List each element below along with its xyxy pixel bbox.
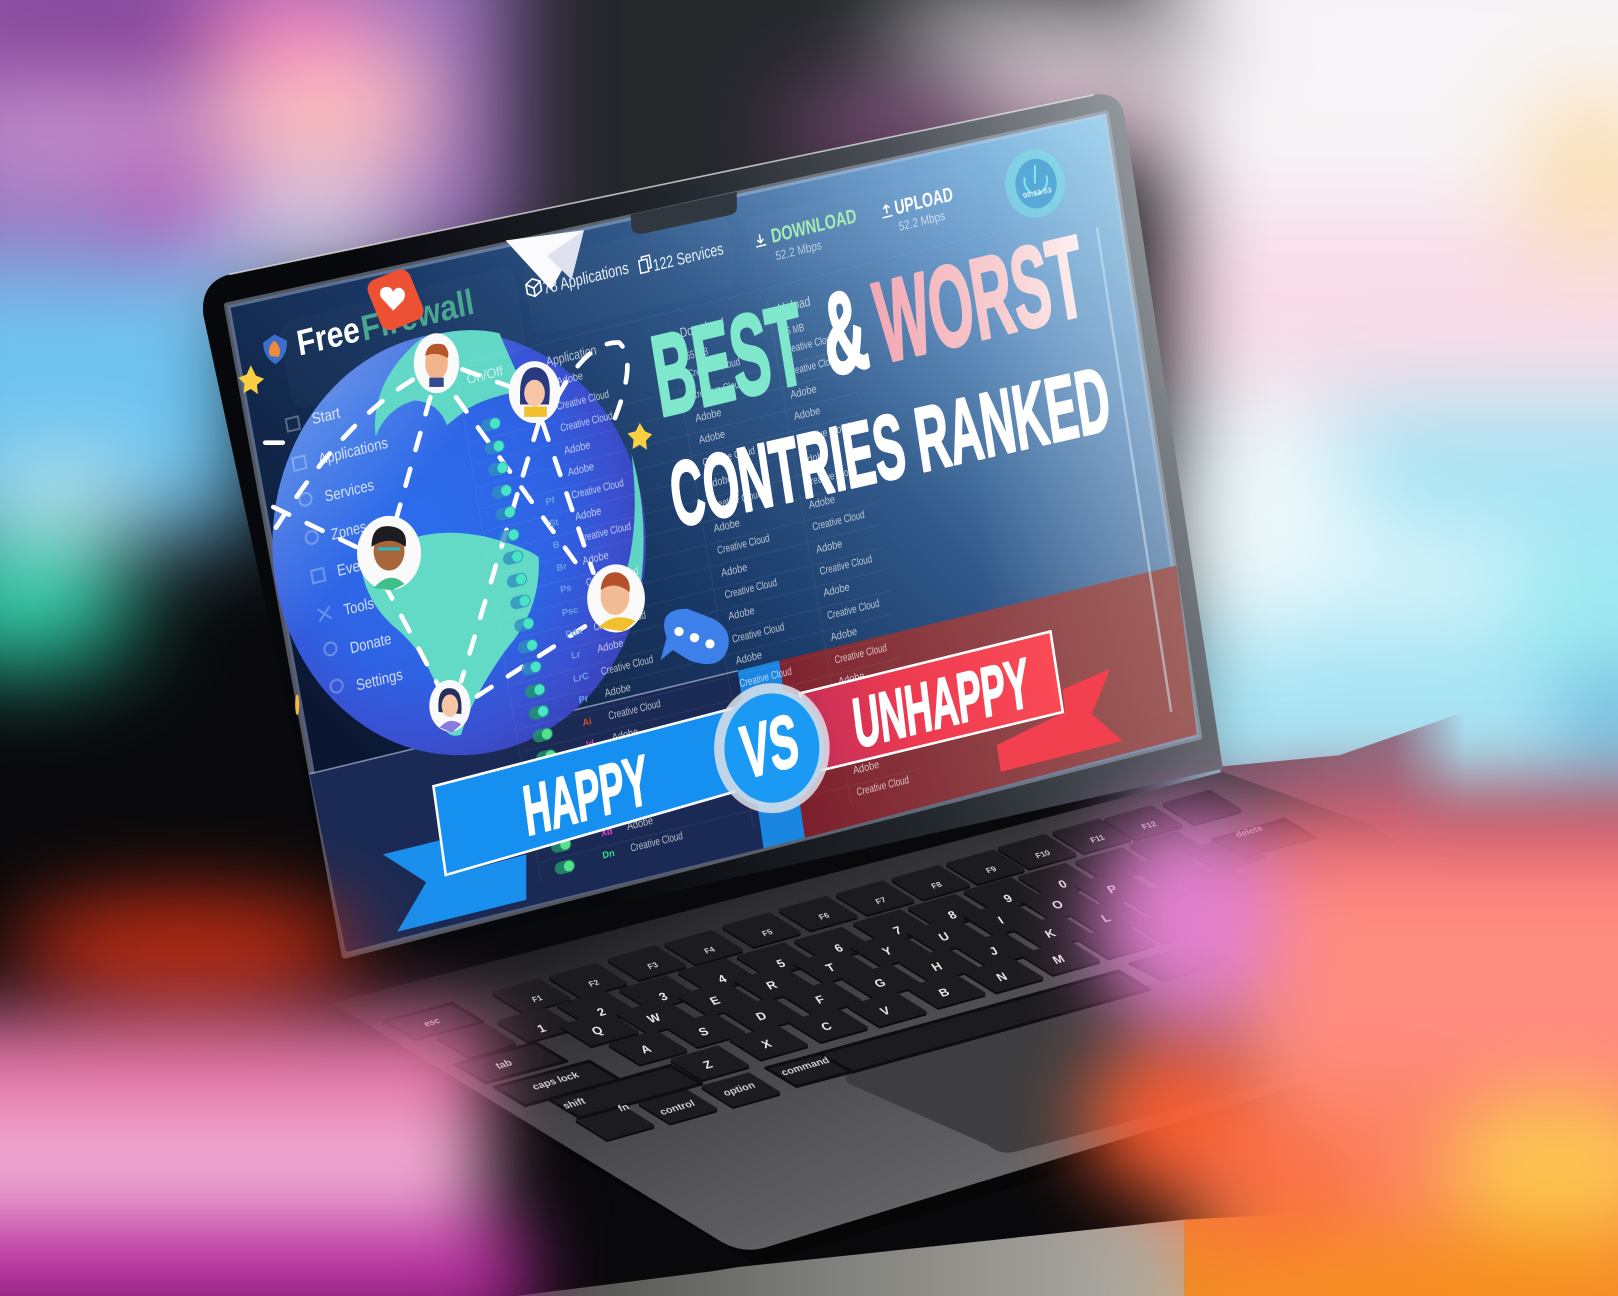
avatar: bottom	[429, 680, 471, 733]
unhappy label: UNHAPPY	[849, 643, 1034, 763]
sidebar menu	[311, 394, 427, 695]
table rows column 1: Creative Cloud	[630, 830, 684, 855]
sidebar menu: Events	[336, 553, 379, 580]
background: blurred colour field	[0, 0, 1618, 825]
table headers: Adobe	[556, 370, 584, 388]
key labels: 2	[594, 1005, 609, 1019]
key labels: L	[1098, 911, 1114, 925]
table rows column 2: Adobe	[742, 693, 770, 712]
key labels: 5	[774, 957, 788, 970]
table rows column 2	[687, 356, 807, 778]
sidebar menu: Services	[323, 477, 376, 506]
table rows column 3: Creative Cloud	[782, 332, 836, 357]
key labels: N	[994, 970, 1010, 984]
modifier key labels: F12	[1140, 820, 1159, 831]
table headers: Upload	[777, 294, 811, 316]
table rows column 3: Adobe	[837, 670, 865, 688]
table rows column 3: Creative Cloud	[804, 464, 858, 489]
sidebar icons	[286, 416, 344, 694]
app icon labels: Ps	[559, 582, 572, 595]
ribbon band	[800, 631, 1063, 772]
table rows column 1: Adobe	[589, 594, 617, 612]
key labels: 9	[1001, 892, 1015, 905]
key labels: Y	[879, 944, 895, 958]
avatar: upper right	[509, 361, 560, 423]
bezel	[203, 94, 1223, 965]
red zone	[779, 565, 1197, 838]
avatar: top	[414, 333, 459, 393]
table rows column 2: Adobe	[750, 738, 778, 756]
table headers: Download	[679, 315, 725, 341]
app icon labels: Id	[585, 738, 595, 750]
modifier key labels: F9	[984, 865, 999, 875]
modifier key labels: F8	[929, 880, 944, 890]
key labels: 0	[1055, 877, 1070, 891]
notch	[630, 192, 737, 234]
laptop lid	[203, 94, 1223, 965]
top bar stats: 122 Services	[652, 239, 725, 275]
table rows column 2: Adobe	[705, 473, 733, 491]
laptop underside	[332, 784, 1610, 1265]
app icon labels: Lr	[570, 649, 581, 661]
icon: cube	[525, 277, 542, 298]
key labels: 6	[832, 941, 846, 955]
key labels: O	[1049, 898, 1066, 912]
upload speed	[893, 183, 957, 234]
table rows column 2: Adobe	[698, 428, 726, 447]
key labels: P	[1104, 882, 1120, 896]
app icon labels: Psc	[561, 604, 579, 618]
table rows column 1: Creative Cloud	[608, 698, 662, 723]
key labels: F	[813, 993, 828, 1006]
power button	[1005, 150, 1065, 218]
ribbon: unhappy	[800, 631, 1123, 772]
table rows column 3: Creative Cloud	[834, 642, 888, 667]
key labels: X	[759, 1037, 775, 1051]
table rows column 3: Adobe	[800, 449, 828, 468]
app icon labels: Ai	[582, 716, 592, 728]
table headers: 55 MB	[685, 345, 709, 363]
download speed: 52.2 Mbps	[774, 238, 823, 263]
modifier key labels: F3	[646, 961, 660, 971]
table rows column 1: Adobe	[567, 461, 595, 479]
title: best and worst: BEST	[644, 279, 813, 442]
heart badge	[364, 266, 427, 333]
table rows column 1: Adobe	[626, 815, 654, 833]
table rows column 2: Creative Cloud	[687, 356, 741, 381]
table rows column 1: Adobe	[611, 726, 639, 744]
icon: upload arrow	[881, 204, 893, 218]
title: countries ranked: CONTRIES RANKED	[664, 348, 1117, 547]
table rows column 3: Creative Cloud	[826, 597, 880, 622]
globe	[272, 330, 646, 755]
key labels: A	[638, 1042, 654, 1056]
table rows column 1: Creative Cloud	[559, 410, 613, 435]
title: best and worst	[644, 212, 1093, 442]
app icon labels	[543, 494, 621, 861]
download speed	[769, 205, 861, 264]
key labels: T	[823, 961, 839, 974]
stone table	[516, 1220, 1185, 1296]
table headers	[466, 287, 815, 416]
key labels: J	[986, 945, 1001, 958]
modifier key labels: delete	[1233, 823, 1265, 839]
avatars	[357, 333, 645, 733]
sidebar menu: Zones	[330, 518, 368, 544]
table rows column 2: Creative Cloud	[724, 577, 778, 601]
vs label: VS	[736, 698, 803, 795]
avatar: right	[587, 564, 645, 633]
app icon labels: Dn	[602, 848, 616, 861]
chat bubble	[660, 609, 729, 664]
table rows column 2: Creative Cloud	[691, 378, 745, 402]
happy label: HAPPY	[519, 740, 653, 851]
modifier key labels: F5	[760, 928, 775, 938]
table rows column 3: Creative Cloud	[819, 553, 873, 578]
modifier key labels: F11	[1088, 833, 1107, 845]
sidebar menu: Tools	[342, 595, 375, 619]
table rows column 3: Adobe	[789, 383, 817, 401]
ribbon: happy	[383, 706, 753, 932]
key labels: G	[872, 976, 889, 990]
icon: download arrow	[754, 233, 766, 247]
key labels: I	[995, 914, 1006, 926]
key labels: K	[1042, 927, 1059, 941]
modifier key labels: option	[721, 1081, 758, 1099]
key labels: 8	[945, 908, 960, 922]
globe highlight	[272, 332, 646, 755]
upload speed: 52.2 Mbps	[898, 209, 946, 234]
key labels: H	[929, 960, 945, 974]
table rows column 1	[556, 388, 684, 855]
download speed: DOWNLOAD	[769, 205, 858, 248]
key labels: R	[763, 978, 780, 992]
deck	[332, 772, 1610, 1250]
logo shield	[263, 334, 287, 364]
app icon labels: B	[552, 539, 560, 551]
stone table side in orange light	[1185, 1197, 1618, 1296]
table rows column 1: Adobe	[604, 682, 632, 700]
screen user interface	[270, 144, 1104, 924]
continent: north	[375, 330, 525, 436]
table headers: On/Off	[466, 363, 504, 387]
modifier key labels: F4	[702, 945, 717, 955]
key labels: B	[936, 985, 952, 999]
table rows column 3: Creative Cloud	[786, 354, 840, 379]
table rows column 2: Creative Cloud	[702, 445, 756, 469]
table headers: 25 MB	[781, 322, 805, 339]
versus badge	[719, 688, 824, 808]
table rows column 1: Adobe	[563, 439, 591, 457]
upload speed: UPLOAD	[893, 183, 955, 220]
power button: 00:13:53	[1022, 185, 1052, 200]
app icon labels: Pr	[578, 693, 589, 705]
modifier key labels: F7	[874, 896, 888, 906]
sidebar menu: Applications	[317, 435, 389, 469]
table rows column 1: Creative Cloud	[622, 786, 676, 810]
modifier key labels	[422, 820, 1265, 1118]
key labels	[534, 877, 1120, 1071]
screen	[227, 114, 1199, 955]
trackpad	[846, 929, 1465, 1153]
key labels: Q	[589, 1024, 606, 1038]
key labels: V	[877, 1004, 894, 1018]
top bar panels	[278, 151, 988, 411]
modifier key labels: fn	[616, 1102, 632, 1114]
table rows column 3: Adobe	[830, 626, 858, 644]
key labels: E	[707, 994, 723, 1008]
app icon labels: St	[548, 517, 559, 529]
table rows column 3: Adobe	[852, 759, 880, 777]
logo text: Firewall	[358, 282, 477, 349]
table headers: Application	[545, 342, 597, 369]
table rows column 2: Adobe	[720, 561, 748, 580]
table surface behind laptop	[1220, 660, 1618, 991]
table rows column 1: Creative Cloud	[600, 653, 654, 678]
modifier key labels: caps lock	[530, 1070, 582, 1092]
key labels: W	[645, 1011, 664, 1026]
table rows column 1: Creative Cloud	[578, 520, 632, 545]
table rows column 3: Creative Cloud	[812, 509, 866, 534]
key labels: C	[818, 1020, 835, 1033]
table rows column 3: Creative Cloud	[841, 685, 895, 710]
table rows column 2: Adobe	[713, 517, 741, 535]
key labels: 1	[534, 1022, 549, 1035]
table rows column 3: Creative Cloud	[856, 774, 910, 799]
ribbon tail	[383, 840, 526, 932]
app icon labels: Br	[556, 561, 568, 573]
table rows column 3: Adobe	[823, 581, 851, 600]
app icon labels: Pdx	[565, 626, 584, 640]
modifier key labels: esc	[422, 1016, 442, 1028]
table rows column 3: Adobe	[808, 494, 836, 512]
table rows column 1: Creative Cloud	[593, 609, 647, 634]
continent: east sliver	[619, 454, 644, 605]
table rows column 3	[782, 332, 910, 799]
table rows column 2: Adobe	[694, 407, 722, 425]
modifier key labels: control	[658, 1099, 698, 1118]
key labels: D	[753, 1009, 770, 1023]
key labels: S	[696, 1025, 711, 1039]
table rows column 3: Creative Cloud	[797, 421, 851, 446]
modifier key labels: shift	[561, 1096, 589, 1112]
table rows column 2: Creative Cloud	[746, 709, 800, 734]
continent: south	[361, 533, 539, 736]
modifier key labels: F2	[587, 978, 602, 988]
table rows column 2: Adobe	[727, 605, 755, 623]
modifier key labels: command	[779, 1056, 832, 1078]
blue strip	[738, 660, 805, 848]
modifier key labels: F6	[817, 911, 832, 921]
key labels: 3	[656, 990, 671, 1003]
paper plane	[506, 230, 584, 290]
table rows column 2: Creative Cloud	[739, 665, 793, 690]
table rows column 1: Creative Cloud	[571, 477, 625, 502]
table rows column 1: Adobe	[574, 505, 602, 523]
table rows column 1: Adobe	[619, 770, 647, 789]
avatar: left	[357, 516, 421, 590]
title: best and worst: WORST	[867, 212, 1093, 388]
modifier key labels: F1	[530, 994, 545, 1004]
key labels: 4	[715, 972, 730, 986]
icon: copy	[638, 255, 652, 273]
table rows column 1: Adobe	[582, 549, 610, 568]
keys	[384, 791, 1316, 1140]
modifier key labels: tab	[494, 1058, 515, 1072]
sidebar menu: Donate	[349, 630, 393, 657]
stars	[238, 365, 652, 715]
sidebar menu: Settings	[355, 666, 404, 695]
modifier key labels: F10	[1034, 849, 1053, 860]
table rows column 2: Creative Cloud	[731, 621, 785, 646]
key labels: M	[1050, 952, 1067, 967]
table rows column 2: Creative Cloud	[709, 488, 763, 513]
table rows column 1: Creative Cloud	[585, 565, 639, 590]
top bar stats: 78 Applications	[542, 258, 630, 298]
flight dashes	[265, 343, 627, 696]
key labels: 7	[890, 924, 905, 937]
table rows column 1: Adobe	[596, 637, 624, 656]
ribbon band	[433, 706, 753, 875]
app icon labels: LrC	[572, 670, 590, 684]
key labels: Z	[700, 1058, 716, 1071]
key labels: U	[936, 930, 952, 944]
ribbon tail	[997, 669, 1123, 772]
app icon labels: Dw	[594, 803, 610, 816]
table rows column 1: Creative Cloud	[556, 388, 610, 413]
table rows column 2: Adobe	[735, 649, 763, 667]
table rows column 3: Adobe	[815, 538, 843, 556]
screen frame line	[1097, 227, 1171, 712]
app icon labels: Pf	[545, 495, 556, 507]
top bar stats	[542, 235, 725, 302]
app icon labels: Xd	[600, 826, 614, 838]
table rows column 3: Adobe	[845, 714, 873, 733]
toggle switches	[480, 416, 576, 876]
sidebar menu: Start	[311, 404, 342, 428]
foreground blurred colour overlays	[0, 795, 1618, 1296]
table rows column 2: Creative Cloud	[753, 753, 807, 778]
logo text	[294, 281, 477, 365]
table rows column 1: Creative Cloud	[615, 741, 669, 766]
logo text: Free	[294, 310, 363, 364]
title: best and worst: &	[813, 264, 875, 401]
lower navy band	[310, 671, 764, 951]
table rows column 2: Creative Cloud	[716, 532, 770, 557]
table rows column 3: Adobe	[793, 405, 821, 423]
